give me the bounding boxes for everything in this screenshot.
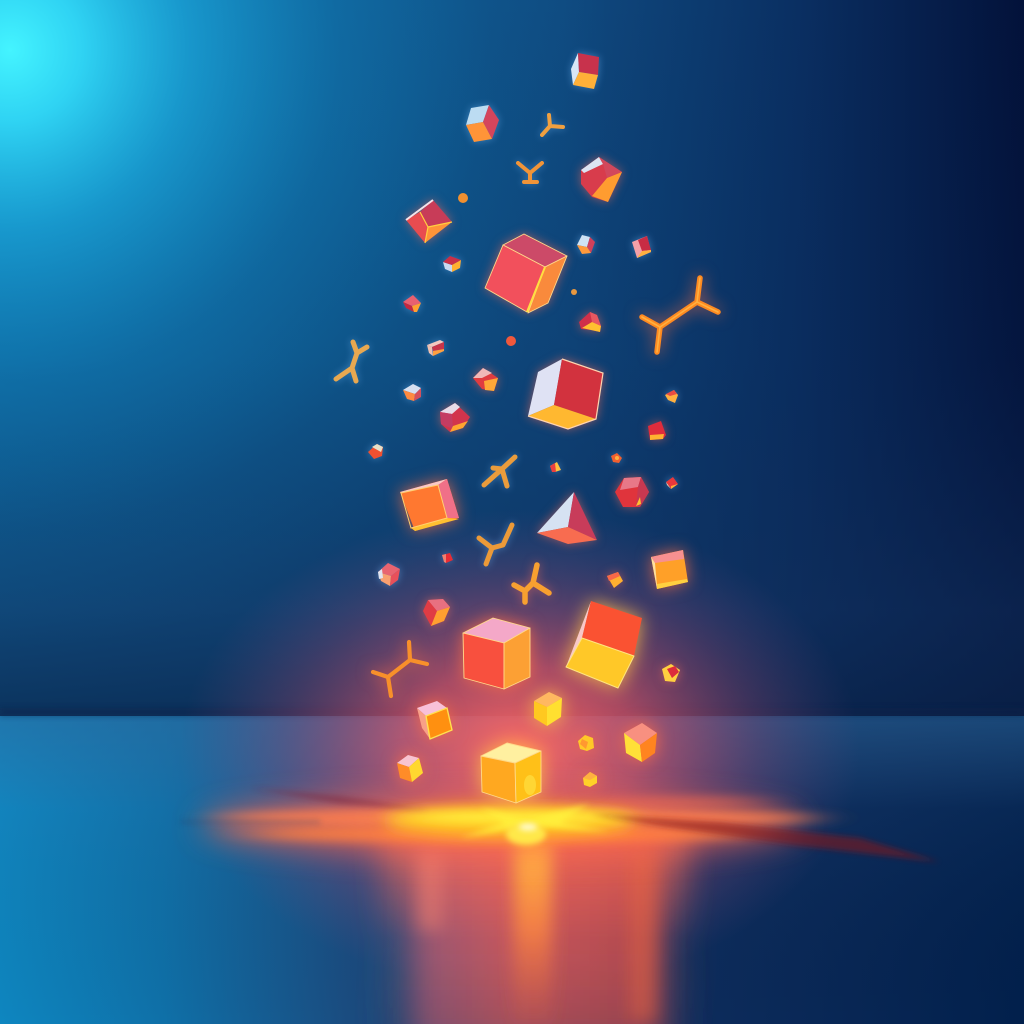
cube: tiny 615,580 <box>607 572 623 588</box>
cube: left tilted red <box>406 200 452 243</box>
floor reflection of the light <box>380 830 690 1024</box>
cube: large salmon <box>485 234 567 313</box>
cube: tiny hex 590,779 <box>583 772 597 787</box>
cube: right orange glowing <box>651 550 688 589</box>
dot: small orange <box>458 193 468 203</box>
cube: tiny 447,558 <box>442 553 453 563</box>
connector: large right glowing <box>642 278 718 352</box>
cube: tiny 616,458 <box>611 453 622 463</box>
reflective floor <box>0 716 1024 1024</box>
cube: small white top <box>577 235 595 254</box>
cube: small 389,574 <box>378 563 400 586</box>
pyramid <box>537 492 597 544</box>
cube: small pink-red <box>632 236 651 258</box>
cube: small 656,430 <box>648 421 666 440</box>
connector: center 495,545 <box>479 525 512 564</box>
cube: small red-yellow <box>579 312 601 332</box>
cube: large red and yellow <box>566 601 642 688</box>
dot: tiny amber <box>571 289 577 295</box>
cube: tiny 435,347 <box>427 340 444 356</box>
dot: tiny red <box>506 336 516 346</box>
connector: center 500,470 <box>484 457 515 486</box>
cube: orange glowing <box>400 479 459 531</box>
connector: small upper <box>542 115 563 135</box>
connector: center 530,582 <box>514 565 549 602</box>
cube: tiny 412,303 <box>403 295 421 312</box>
cube: small 485,379 <box>473 368 498 391</box>
cube: salmon and yellow <box>463 618 530 689</box>
cube: tiny 672,483 <box>666 477 678 489</box>
cube: faceted 455,417 <box>440 403 470 432</box>
cube: tiny hex 586,743 <box>578 735 594 751</box>
cube: white and red large <box>528 359 603 429</box>
horizon shadow <box>0 708 1024 716</box>
connector: far left <box>336 342 367 381</box>
cube: tiny 555,467 <box>550 462 561 472</box>
cube: small 436,612 <box>423 599 450 626</box>
cube: yellow 547,709 <box>534 692 562 726</box>
cube: tiny 452,264 <box>443 256 461 272</box>
light burst on the floor <box>180 788 940 862</box>
cube: tiny 375,451 <box>368 444 383 459</box>
cube: 641,742 <box>624 723 657 762</box>
connector: Y with foot <box>518 163 542 182</box>
cube: orange 434,720 <box>417 701 452 739</box>
cube: tiny 670,673 <box>662 664 680 682</box>
cube: 410,768 <box>397 755 423 782</box>
cube: faceted upper right <box>581 157 622 202</box>
cube: tiny 671,396 <box>665 390 678 403</box>
pink ambient glow <box>180 510 860 990</box>
cube: top white-red-orange <box>571 53 599 89</box>
cube: main amber above burst <box>481 743 541 803</box>
connector: lower left glowing <box>373 642 427 696</box>
cube: upper left blue-top <box>466 105 499 142</box>
cube: faceted 631,492 <box>615 477 649 507</box>
cube: small 412,392 <box>403 384 421 401</box>
background wall <box>0 0 1024 717</box>
